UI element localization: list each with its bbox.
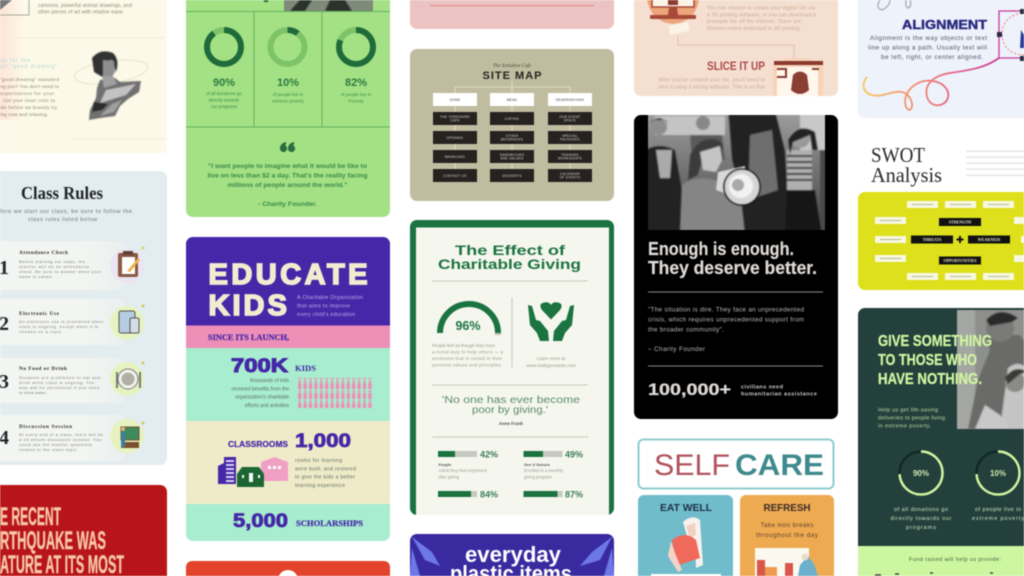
stat: 5,000 scholarships: 5,000 — [233, 511, 288, 532]
text block: digital file: libraries online dedicated to 3D printing. — [707, 26, 801, 32]
heading: alignment: ALIGNMENT — [902, 18, 987, 32]
chart: 82% donut — [339, 30, 373, 104]
diagram: SWOT labels: WEAKNESS — [978, 237, 1001, 242]
stat: 700K kids: received benefits from the — [231, 386, 289, 392]
stat: 100,000+ civilians: humanitarian assistance — [741, 392, 817, 398]
column: reservations: SPACE — [564, 119, 576, 123]
diagram: SWOT labels: OPPORTUNITIES — [944, 258, 977, 263]
heading: give something: HAVE NOTHING. — [878, 371, 982, 388]
column: reservations: PACKAGES — [560, 138, 580, 142]
stat: 1,000 classrooms: to give the kids a better — [295, 474, 355, 480]
chart: 90% donut: our programs — [211, 104, 238, 109]
heading: earthquake headline: RTHQUAKE WAS — [0, 527, 106, 555]
column: reservations: WORKSHOPS — [558, 157, 582, 161]
heading: effect of charitable giving: Charitable Giving — [438, 257, 581, 272]
panel: class rules — [0, 171, 167, 465]
stat: 1,000 classrooms: learning experience — [295, 483, 345, 489]
icon: 3D printer — [773, 58, 823, 96]
row: no food or drink: Students are prohibited to eat and — [19, 375, 100, 380]
text block: alignment description: Alignment is the way objects or text — [870, 35, 987, 42]
photo: top strip — [264, 0, 373, 11]
row: electronic use — [0, 299, 144, 345]
label: since its launch: SINCE ITS LAUNCH, — [208, 333, 289, 342]
panel: eat well — [638, 495, 733, 576]
chart: 90% donut — [206, 30, 242, 109]
text block: top paragraph: cartoons, powerful animal drawings, and — [38, 3, 132, 9]
row: attendance check: Attendance Check — [19, 250, 68, 256]
photo: children — [956, 309, 1024, 430]
column: home: BRANCHES — [445, 155, 465, 159]
panel: poverty statistics green — [186, 0, 390, 217]
heading: educate kids: KIDS — [208, 290, 290, 322]
panel: pink poster — [410, 0, 614, 29]
panel: SWOT analysis — [858, 143, 1024, 290]
chart: 10% ring: of people live in — [975, 507, 1021, 513]
heading: SWOT analysis: Analysis — [871, 163, 942, 187]
diagram: SWOT labels: STRENGTH — [949, 220, 972, 224]
text block: digital file — [707, 6, 816, 32]
icon: classical bust — [73, 51, 149, 120]
panel: orange poster — [186, 561, 390, 576]
heading: good drawing: up for the — [0, 58, 30, 64]
column: reservations: OF EVENTS — [560, 176, 580, 180]
heading: earthquake headline: E RECENT — [0, 503, 61, 531]
text block: top paragraph: other pieces of art with relative ease. — [38, 10, 124, 16]
icon: squiggle top — [878, 0, 911, 10]
text block: charity quote: millions of people around the world." — [228, 182, 348, 189]
heading: educate kids: EDUCATE — [208, 259, 371, 291]
icon: desktop computer — [647, 0, 699, 35]
column: menu: AND SALADS — [500, 157, 524, 161]
column: menu: BEVERAGES — [501, 138, 523, 142]
heading: give something — [878, 333, 992, 388]
panel: effect of charitable giving — [410, 220, 614, 515]
chart: 96% gauge: a moral duty to help others — a — [432, 350, 503, 354]
row: no food or drink — [0, 358, 144, 403]
stat: 1,000 classrooms: 1,000 — [295, 431, 351, 452]
text block: take mini breaks — [756, 522, 819, 539]
text block: charity quote: - Charity Founder. — [258, 201, 317, 208]
text block: SWOT description — [966, 150, 1024, 176]
text block: alignment description: be left, right, or center aligned. — [881, 54, 983, 61]
stat: 700K kids: KIDS — [295, 364, 317, 373]
chart: 84% bar: 84% — [480, 490, 498, 500]
column: menu: SANDWICHES — [500, 153, 524, 157]
text block: charity founder quote: crisis, which requires unprecedented support from — [648, 316, 804, 324]
text block: take mini breaks: throughout the day — [756, 532, 819, 539]
text block: top paragraph — [38, 3, 132, 16]
stat: 700K kids: thousands of kids — [250, 378, 289, 384]
chart: 49% gen x: Enrolled in a monthly — [524, 468, 564, 473]
text block: charity founder quote: – Charity Founder — [648, 346, 706, 353]
chart: kids pictogram — [298, 378, 374, 408]
text block: learn more: Learn more at — [537, 356, 566, 361]
chart: 49% gen x: giving program — [524, 474, 552, 480]
heading: give something: GIVE SOMETHING — [878, 333, 992, 350]
heading: good drawing — [0, 58, 57, 70]
column: menu: MENU — [507, 98, 518, 102]
text block: good drawing paragraph: . Get your inner critic to — [0, 98, 55, 104]
chart: 82% donut: Poverty — [349, 98, 364, 104]
row: discussion session: At every end of a class, there will be — [19, 432, 103, 437]
stat: 1,000 classrooms: CLASSROOMS — [228, 439, 288, 449]
text block: learn more — [526, 356, 576, 368]
column: home: CONTACT US — [443, 174, 467, 178]
stat: 100,000+ civilians — [648, 381, 817, 399]
row: no food or drink: No Food or Drink — [19, 366, 67, 372]
heading: self care — [654, 449, 824, 482]
text block: slicing — [658, 78, 766, 90]
row: attendance check: check. Be sure to answer when your — [19, 269, 102, 274]
text block: good drawing paragraph — [0, 77, 59, 118]
chart: 10% ring — [972, 452, 1024, 522]
text block: charity founder quote: "The situation is dire. They face an unprecedented — [648, 306, 804, 314]
chart: 42% people: People — [438, 462, 452, 467]
heading: enough is enough: Enough is enough. — [648, 239, 794, 259]
panel: drawing tips poster — [0, 0, 167, 153]
text block: alignment description: line up along a path. Usually text will — [868, 44, 987, 52]
text block: digital file: premade file off the internet. There are — [707, 19, 801, 25]
panel: refresh — [740, 495, 834, 576]
chart: 42% people: Admit they feel enjoyment — [438, 468, 488, 473]
column: reservations — [548, 93, 592, 182]
stat: 700K kids: efforts and activities — [245, 403, 289, 409]
heading: class rules: Class Rules — [21, 183, 103, 203]
panel: self care header — [638, 440, 834, 488]
chart: 42% people: after giving — [438, 474, 460, 480]
text block: anne frank quote: poor by giving.' — [472, 405, 548, 416]
icon: school buildings — [218, 457, 288, 487]
chart: 42% people — [438, 450, 498, 480]
row: no food or drink: drink while class is ongoing. You — [19, 380, 94, 385]
column: reservations: OUR EVENT — [559, 115, 581, 119]
text block: organisation summary: that aims to improve — [297, 304, 350, 310]
text block: help us — [878, 408, 945, 430]
icon: clipboard — [110, 246, 144, 283]
row: discussion session: related to the class topic. — [19, 447, 78, 452]
diagram: SWOT labels — [911, 218, 1010, 264]
chart: 96% gauge: sentiment that is rooted in their — [432, 356, 502, 361]
heading: effect of charitable giving — [438, 243, 581, 272]
icon: framed statue corner — [0, 0, 29, 15]
chart: 10% donut — [270, 30, 305, 104]
row: electronic use: All electronic use is prohibited when — [19, 319, 103, 324]
heading: enough is enough: They deserve better. — [648, 258, 817, 278]
icon: tablet and phone — [110, 304, 144, 340]
chart: 90% ring: 90% — [913, 469, 929, 478]
heading: self care: CARE — [735, 449, 824, 482]
stat: 100,000+ civilians: 100,000+ — [648, 381, 731, 399]
text block: digital file: You can choose to create your digital file via — [707, 6, 815, 12]
icon: teacher at board — [110, 419, 144, 453]
chart: 96% gauge: 96% — [455, 319, 481, 333]
panel: site map — [410, 49, 614, 201]
chart: 10% donut: 10% — [277, 77, 299, 89]
chart: 90% donut: directly towards — [209, 98, 240, 102]
stat: 700K kids: 700K — [231, 356, 288, 377]
footer: fund raised — [858, 546, 1024, 576]
heading: SWOT analysis: SWOT — [871, 143, 925, 167]
row: attendance check — [0, 241, 144, 290]
text block: help us: in extreme poverty. — [878, 424, 931, 430]
chart: 90% donut: of all donations go — [206, 91, 242, 96]
heading: educate kids — [208, 259, 371, 322]
stat: 1,000 classrooms: were built, and restored — [295, 466, 356, 472]
chart: 87% bar — [524, 490, 583, 500]
stat: 5,000 scholarships: SCHOLARSHIPS — [296, 519, 364, 528]
row: discussion session: Discussion Session — [19, 424, 72, 430]
panel: enough is enough — [634, 108, 838, 419]
heading: earthquake headline — [0, 503, 124, 576]
column: menu: DESSERTS — [502, 174, 522, 178]
text block: help us: deliveries to people living — [878, 416, 945, 422]
text block: digital file: a 3D printing software, or you can download a — [707, 12, 816, 18]
row: electronic use: class is ongoing, except when it is — [19, 324, 98, 329]
panel: 3D printing steps — [634, 0, 838, 96]
heading: site map: SITE MAP — [482, 70, 542, 82]
chart: 90% ring: directly towards our — [890, 516, 952, 522]
row: discussion session: could ask the teacher questions — [19, 442, 92, 447]
text block: good drawing paragraph: expectations for your — [0, 91, 54, 97]
heading: effect of charitable giving: The Effect of — [455, 243, 566, 258]
text block: anne frank quote — [442, 395, 581, 426]
footer: fund raised: Fund raised will help us provide: — [909, 557, 1001, 563]
heading: site map — [482, 64, 542, 82]
text block: charity quote: "I want people to imagine what it would be like to — [208, 163, 367, 170]
text block: organisation summary — [297, 295, 363, 318]
column: menu: OTHER — [506, 134, 519, 138]
text block: anne frank quote: Anne Frank — [499, 421, 524, 426]
heading: everyday plastic items — [450, 542, 572, 576]
chart: 90% ring — [890, 452, 952, 531]
text block: charity founder quote — [648, 306, 804, 353]
text block: good drawing paragraph: ide before we bravely try — [0, 105, 58, 111]
stat: 100,000+ civilians: civilians need — [741, 384, 784, 390]
panel: everyday plastic items — [410, 534, 614, 576]
column: reservations: TRAINING — [561, 153, 579, 157]
heading: SWOT analysis — [871, 143, 942, 187]
icon: quotation mark — [280, 142, 295, 152]
panel: give something — [858, 305, 1024, 576]
column: home: CAFE — [450, 119, 460, 123]
chart: 82% donut: 82% — [345, 77, 367, 89]
column: home: THE YORKSHIRE — [440, 115, 470, 119]
text block: intro: class rules listed below — [28, 217, 98, 223]
chart: 96% gauge — [432, 304, 503, 368]
row: attendance check: Before starting our class, the — [19, 259, 85, 264]
diagram: question boxes — [875, 201, 1024, 280]
column: home: HOME — [450, 98, 460, 102]
column: home — [433, 93, 477, 182]
text block: organisation summary: A Charitable Organization — [297, 295, 363, 301]
text block: charity quote: live on less than $2 a day. That's the reality facing — [208, 172, 368, 180]
column: home: OPENING — [447, 136, 464, 140]
heading: enough is enough — [648, 239, 817, 278]
column: reservations: RESERVATIONS — [556, 98, 584, 102]
stat: 700K kids — [231, 356, 374, 409]
chart: 90% ring: programs — [906, 525, 936, 531]
heading: self care: SELF — [654, 449, 730, 482]
column: menu — [490, 93, 534, 182]
chart: 90% donut: 90% — [213, 77, 235, 89]
chart: 90% ring: of all donations go — [894, 507, 948, 513]
stat: 1,000 classrooms: rooms for learning — [295, 458, 342, 464]
text block: alignment description — [868, 35, 987, 61]
chart: 10% donut: of people live in — [273, 92, 304, 97]
chart: 42% people: 42% — [480, 450, 498, 460]
text block: charity quote — [208, 163, 368, 208]
text block: learn more: www.reallygreatsite.com — [526, 363, 576, 368]
column: reservations: SPECIAL — [562, 134, 578, 138]
chart: 84% bar — [438, 490, 498, 500]
chart: 82% donut: of people live in — [341, 92, 372, 97]
row: discussion session — [0, 415, 144, 461]
icon: selection frame — [997, 9, 1024, 61]
row: no food or drink: to drink water. — [19, 390, 47, 395]
chart: 10% ring: 10% — [990, 469, 1006, 478]
row: electronic use: Electronic Use — [19, 311, 60, 317]
chart: 49% gen x: 49% — [565, 450, 583, 460]
chart: 96% gauge: People feel as though they have — [432, 343, 495, 348]
text block: help us: Help us get life-saving — [878, 408, 938, 414]
text block: intro: fore we start our class, be sure to follow the — [0, 209, 132, 215]
photo: protest with megaphone — [647, 114, 826, 231]
chart: 49% gen x — [524, 450, 583, 480]
text block: slicing: After you've created your file, you'll need to — [659, 78, 765, 84]
text block: good drawing paragraph: ng you? You don't need to — [0, 84, 59, 90]
text block: organisation summary: every child's education — [297, 312, 355, 318]
heading: site map: The Yorkshire Cafe — [493, 64, 532, 69]
row: discussion session: a 15-minute discussion session. You — [19, 437, 101, 442]
panel: earthquake poster — [0, 485, 167, 576]
heading: good drawing: all "good drawing" — [0, 64, 57, 70]
icon: plate and cutlery — [110, 362, 144, 396]
text block: anne frank quote: 'No one has ever become — [442, 395, 581, 406]
chart: 10% donut: extreme poverty — [272, 98, 305, 104]
column: menu: COFFEE — [505, 117, 519, 121]
heading: eat well: EAT WELL — [660, 503, 712, 514]
heading: everyday plastic items: everyday — [465, 542, 562, 567]
icon: squiggle line — [864, 58, 999, 110]
text block: take mini breaks: Take mini breaks — [760, 522, 814, 529]
heading: give something: TO THOSE WHO — [878, 352, 977, 369]
chart: 49% gen x: Gen X Donors — [524, 462, 550, 467]
text block: good drawing paragraph: ing new and relaxing. — [0, 112, 48, 118]
chart: 96% gauge: personal values and principles. — [432, 362, 502, 368]
text block: charity founder quote: the broader community". — [648, 326, 724, 334]
heading: refresh: REFRESH — [764, 503, 810, 514]
chart: 87% bar: 87% — [565, 490, 583, 500]
row: attendance check: name is called. — [19, 274, 53, 279]
illustration: woman eating — [651, 517, 721, 576]
text block: intro — [0, 209, 132, 223]
row: no food or drink: may ask for permission if you need — [19, 385, 99, 390]
panel: alignment — [858, 0, 1024, 118]
chart: 10% ring: extreme poverty — [972, 516, 1024, 522]
panel: educate kids — [186, 237, 390, 541]
stat: 700K kids: organization's charitable — [235, 394, 289, 400]
stat: 5,000 scholarships — [233, 511, 364, 532]
row: electronic use: needed on a topic. — [19, 329, 63, 334]
illustration: window with city view — [755, 548, 818, 576]
row: attendance check: teacher will do an attendance — [19, 264, 89, 269]
stat: 1,000 classrooms — [218, 431, 356, 489]
text block: good drawing paragraph: "good drawing" standard — [0, 77, 59, 83]
text block: slicing: slice it using a slicing software. This is so that — [658, 84, 766, 90]
diagram: SWOT labels: THREATS — [923, 237, 942, 242]
column: reservations: CALENDAR — [560, 172, 580, 176]
icon: hands holding heart — [528, 302, 574, 341]
heading: slice it up: SLICE IT UP — [707, 61, 765, 73]
